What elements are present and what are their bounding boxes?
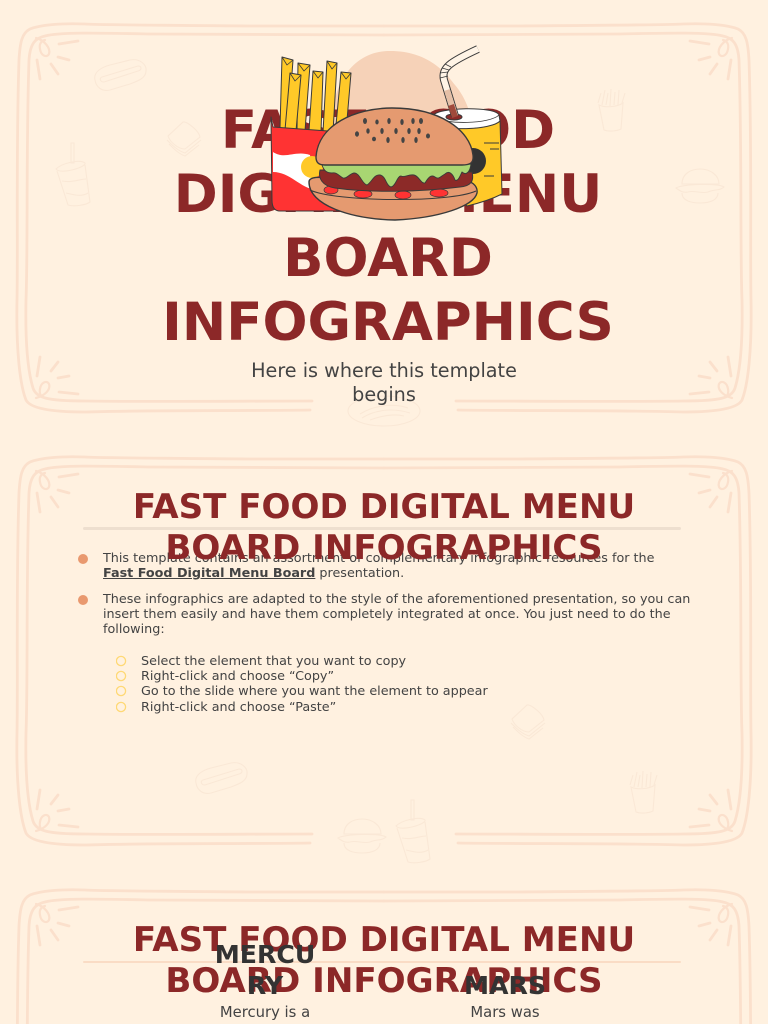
- paragraph 2: following:: [103, 622, 165, 637]
- step text: Go to the slide where you want the element to appear: [141, 684, 488, 699]
- title: FAST FOOD: [221, 100, 555, 161]
- title: INFOGRAPHICS: [162, 292, 614, 353]
- fries: [280, 57, 351, 132]
- title: DIGITAL MENU: [174, 164, 602, 225]
- paragraph 2: insert them easily and have them completely integrated at once. You just need to do the: [103, 607, 671, 622]
- peach blob behind title: [331, 51, 474, 130]
- slide 3 heading: FAST FOOD DIGITAL MENU: [133, 920, 635, 960]
- bullet 1: [78, 554, 88, 564]
- drink: [433, 118, 502, 206]
- subtitle: Here is where this template: [251, 359, 517, 382]
- doodles: slide 1: [56, 60, 724, 426]
- frame: slide 1: [17, 24, 751, 412]
- column: Mars: [464, 971, 546, 1021]
- Mars heading: MARS: [464, 971, 546, 1000]
- title: [162, 100, 614, 353]
- Mercury heading: MERCU: [215, 940, 315, 969]
- fries box: [271, 117, 340, 211]
- step text: [141, 654, 488, 715]
- paragraph 2: [102, 592, 690, 637]
- step markers: [116, 656, 126, 712]
- tomato: [324, 186, 448, 199]
- doodles: slide 2: [196, 705, 657, 863]
- slide 3 heading: [133, 920, 635, 1001]
- step text: Right-click and choose “Paste”: [141, 700, 336, 715]
- slide 3 heading: BOARD INFOGRAPHICS: [165, 961, 603, 1001]
- Mercury heading: RY: [247, 971, 283, 1000]
- paragraph 1: [102, 551, 654, 581]
- paragraph 1: This template contains an assortment of complementary infographic resources for the: [103, 551, 654, 566]
- frame: slide 3: [17, 890, 751, 1024]
- steps list: [116, 654, 488, 715]
- body text: slide 2: [78, 551, 690, 715]
- slide 2 heading: FAST FOOD DIGITAL MENU: [133, 487, 635, 527]
- bottom bun: [309, 177, 477, 220]
- Mercury text: Mercury is a: [220, 1004, 310, 1021]
- slide 2 heading: BOARD INFOGRAPHICS: [165, 528, 603, 568]
- paragraph 1: Fast Food Digital Menu Board presentation.: [103, 566, 404, 581]
- bullet 2: [78, 595, 88, 605]
- step text: Select the element that you want to copy: [141, 654, 406, 669]
- frame: slide 2: [17, 457, 751, 845]
- Mars text: Mars was: [470, 1004, 540, 1021]
- slide 2 heading: [133, 487, 635, 568]
- top bun: [316, 108, 473, 165]
- Mercury heading: [215, 940, 315, 1000]
- column: Mercury: [215, 940, 315, 1021]
- straw: [440, 49, 478, 117]
- paragraph 2: These infographics are adapted to the style of the aforementioned presentation, so you can: [103, 592, 690, 607]
- step text: Right-click and choose “Copy”: [141, 669, 334, 684]
- divider: slide 2: [83, 527, 681, 530]
- patty: [320, 170, 473, 191]
- subtitle: [251, 359, 517, 406]
- sesame seeds: [355, 118, 430, 143]
- divider: slide 3: [83, 961, 681, 963]
- subtitle: begins: [352, 382, 416, 406]
- title: BOARD: [283, 228, 493, 289]
- lettuce: [322, 164, 471, 187]
